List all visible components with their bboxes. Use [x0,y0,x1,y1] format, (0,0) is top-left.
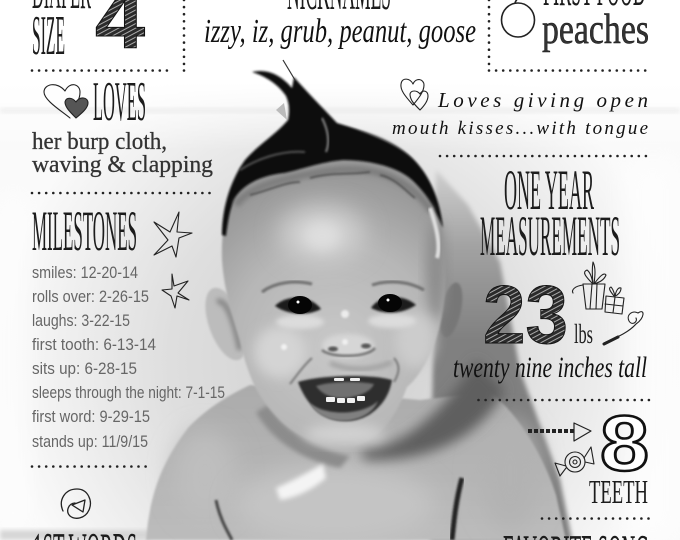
left eye [275,296,324,329]
nose [281,310,392,369]
nickname list: izzy, iz, grub, peanut, goose [204,13,476,50]
smile creases [290,358,398,384]
panel: open mouth kisses [392,79,648,139]
panel: diaper size [32,0,145,67]
icon: small star [162,274,189,308]
mouth [298,376,392,421]
milestones list: sleeps through the night: 7-1-15 [32,383,225,402]
icon: peach [502,0,534,37]
forehead highlight [280,206,364,262]
icon: double hearts [401,79,428,110]
heading: diaper size: SIZE [32,5,65,67]
kisses text [392,88,648,139]
milestones list: stands up: 11/9/15 [32,432,148,451]
left brow [262,282,312,292]
milestones list: laughs: 3-22-15 [32,311,130,330]
head shape [222,125,445,447]
big number 8: 8 [600,399,649,487]
panel: milestones [32,200,225,451]
peaches text: peaches [542,7,649,53]
left ear [197,282,255,366]
icon: arrow [528,423,591,441]
loves description [32,129,213,178]
milestones list: smiles: 12-20-14 [32,263,138,282]
lbs label: lbs [574,319,593,349]
heading: diaper size [32,0,91,67]
right eye [368,294,416,328]
milestones list: first word: 9-29-15 [32,407,150,426]
panel: loves [32,71,213,178]
hair streaks and foam [236,60,438,258]
panel: milestones: MILESTONES [32,200,137,263]
panel: loves: LOVES [93,71,146,133]
panel: teeth [528,399,649,511]
right ear [435,281,467,339]
photo: baby [146,60,566,540]
panel: one year measurements [453,159,647,384]
icon: party blower [604,312,643,344]
icon: large gift [572,262,606,309]
panel: first food [502,0,649,53]
panel: first words [33,489,137,540]
cheeks [254,326,306,378]
milestones list: rolls over: 2-26-15 [32,287,149,306]
milestones list [32,263,225,451]
panel: nicknames [204,0,476,50]
right face shading [426,220,446,320]
icon: speech spiral [61,489,90,518]
milestones list: sits up: 6-28-15 [32,359,137,378]
icon: small gift [605,287,624,314]
hair [222,71,443,236]
milestones list: first tooth: 6-13-14 [32,335,156,354]
loves description: her burp cloth, [32,129,167,155]
icon: hearts [44,85,88,118]
baby torso [146,385,566,540]
kisses text: mouth kisses...with tongue [392,118,648,139]
icon: large star [154,212,192,257]
right brow [372,282,424,290]
heading: one year measurements [480,159,620,268]
icon: candy [555,447,594,476]
photo: wall shadow behind baby [430,170,572,540]
loves description: waving & clapping [32,152,213,178]
weight number: 23 [483,268,568,361]
kisses text: Loves giving open [437,88,648,112]
forehead sparkle [304,222,340,250]
